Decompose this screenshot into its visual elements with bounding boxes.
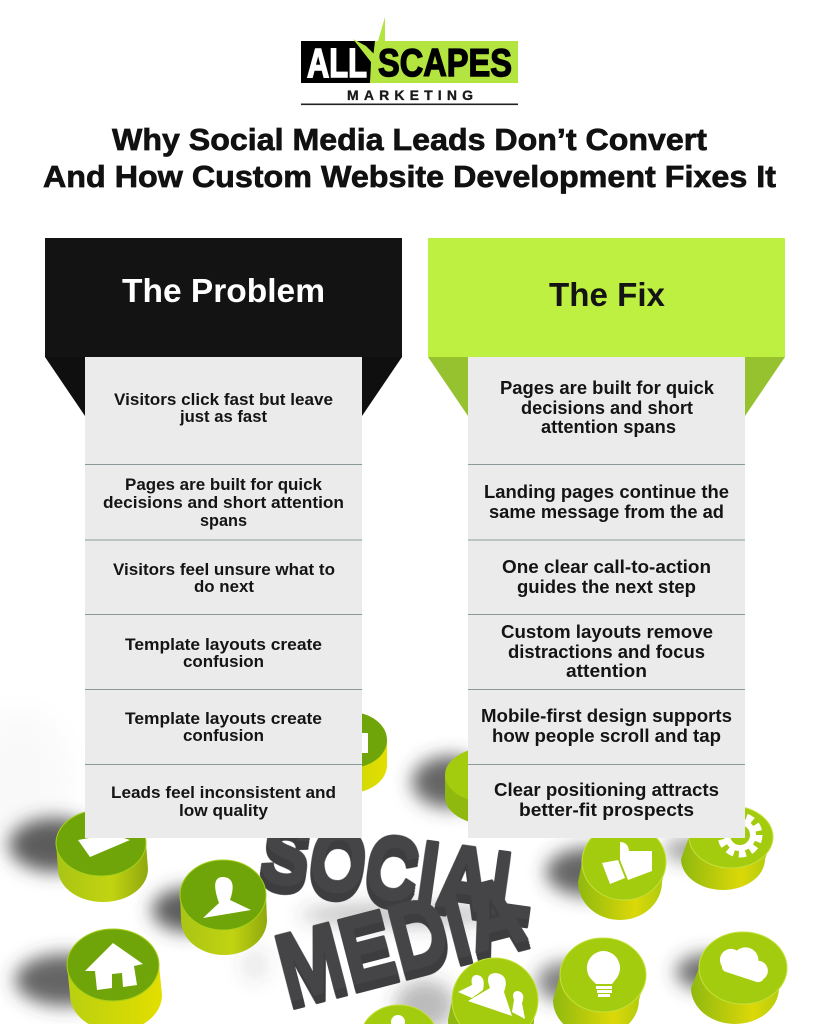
item 2: decisions and short attention bbox=[103, 493, 344, 512]
icon: check cylinder bbox=[56, 810, 148, 902]
item 1: Visitors click fast but leave bbox=[114, 390, 333, 409]
logo: ALL bbox=[307, 40, 367, 86]
panel: the problem bbox=[45, 238, 402, 838]
item 3: Visitors feel unsure what to bbox=[113, 560, 335, 579]
item 1 bbox=[500, 377, 715, 437]
item 6: Clear positioning attracts bbox=[494, 779, 719, 800]
item 1: decisions and short bbox=[521, 397, 693, 418]
icon: thumbs up cylinder bbox=[578, 824, 666, 920]
item 1 bbox=[114, 390, 333, 426]
item 2: same message from the ad bbox=[489, 501, 724, 522]
icon: cylinder behind left panel bbox=[313, 712, 387, 793]
item 1: attention spans bbox=[541, 416, 676, 437]
icon: light bulb cylinder bbox=[553, 938, 646, 1024]
icon: cloud cylinder bbox=[691, 932, 787, 1024]
item 4 bbox=[125, 635, 322, 671]
title bbox=[43, 122, 776, 194]
item 6: Leads feel inconsistent and bbox=[111, 783, 336, 802]
text: SOCIAL 3D letters: SOCIAL bbox=[255, 801, 541, 938]
icon: bottom partial cylinder bbox=[361, 1005, 437, 1024]
item 2: Pages are built for quick bbox=[125, 475, 323, 494]
header: the problem: The Problem bbox=[122, 272, 325, 309]
item 5: Template layouts create bbox=[125, 709, 322, 728]
icon: person cylinder bbox=[180, 860, 267, 955]
item 4: Template layouts create bbox=[125, 635, 322, 654]
item 6: better-fit prospects bbox=[519, 799, 694, 820]
item 5: confusion bbox=[183, 726, 264, 745]
panel: the fix bbox=[428, 238, 785, 838]
item 2: Landing pages continue the bbox=[484, 481, 729, 502]
logo: SCAPES bbox=[378, 42, 512, 85]
header: the fix bbox=[428, 238, 785, 416]
item 4: Custom layouts remove bbox=[501, 621, 713, 642]
item 3: One clear call-to-action bbox=[502, 556, 711, 577]
item 3 bbox=[502, 556, 711, 597]
item 3: guides the next step bbox=[517, 576, 696, 597]
logo: MARKETING bbox=[347, 87, 473, 103]
item 5: how people scroll and tap bbox=[492, 725, 721, 746]
item 4: attention bbox=[566, 660, 647, 681]
item 5: Mobile-first design supports bbox=[481, 705, 732, 726]
title: Why Social Media Leads Don’t Convert bbox=[112, 122, 707, 157]
list: fix items bbox=[468, 357, 745, 838]
item 2 bbox=[484, 481, 729, 522]
icon: cylinder behind right panel bbox=[445, 747, 535, 825]
header: the fix: The Fix bbox=[549, 276, 666, 313]
item 2 bbox=[103, 475, 344, 530]
item 1: Pages are built for quick bbox=[500, 377, 715, 398]
header: the problem bbox=[45, 238, 402, 416]
background photo: social media icons bbox=[0, 700, 819, 1024]
item 2: spans bbox=[200, 511, 247, 530]
item 6 bbox=[111, 783, 336, 820]
icon: people cylinder bbox=[448, 958, 538, 1024]
icon: house cylinder bbox=[67, 929, 162, 1024]
item 4 bbox=[501, 621, 713, 681]
item 3 bbox=[113, 560, 335, 596]
text: MEDIA 3D letters: MEDIA bbox=[266, 856, 534, 1021]
list: problem items bbox=[85, 357, 362, 838]
item 1: just as fast bbox=[179, 407, 267, 426]
logo bbox=[301, 17, 518, 105]
icon: gear cylinder bbox=[681, 806, 773, 890]
title: And How Custom Website Development Fixes It bbox=[43, 159, 776, 194]
item 4: distractions and focus bbox=[508, 641, 705, 662]
item 3: do next bbox=[194, 577, 254, 596]
item 5 bbox=[125, 709, 322, 745]
item 5 bbox=[481, 705, 732, 746]
item 6: low quality bbox=[179, 801, 269, 820]
item 6 bbox=[494, 779, 719, 820]
item 4: confusion bbox=[183, 652, 264, 671]
cast shadows bbox=[9, 756, 740, 1024]
